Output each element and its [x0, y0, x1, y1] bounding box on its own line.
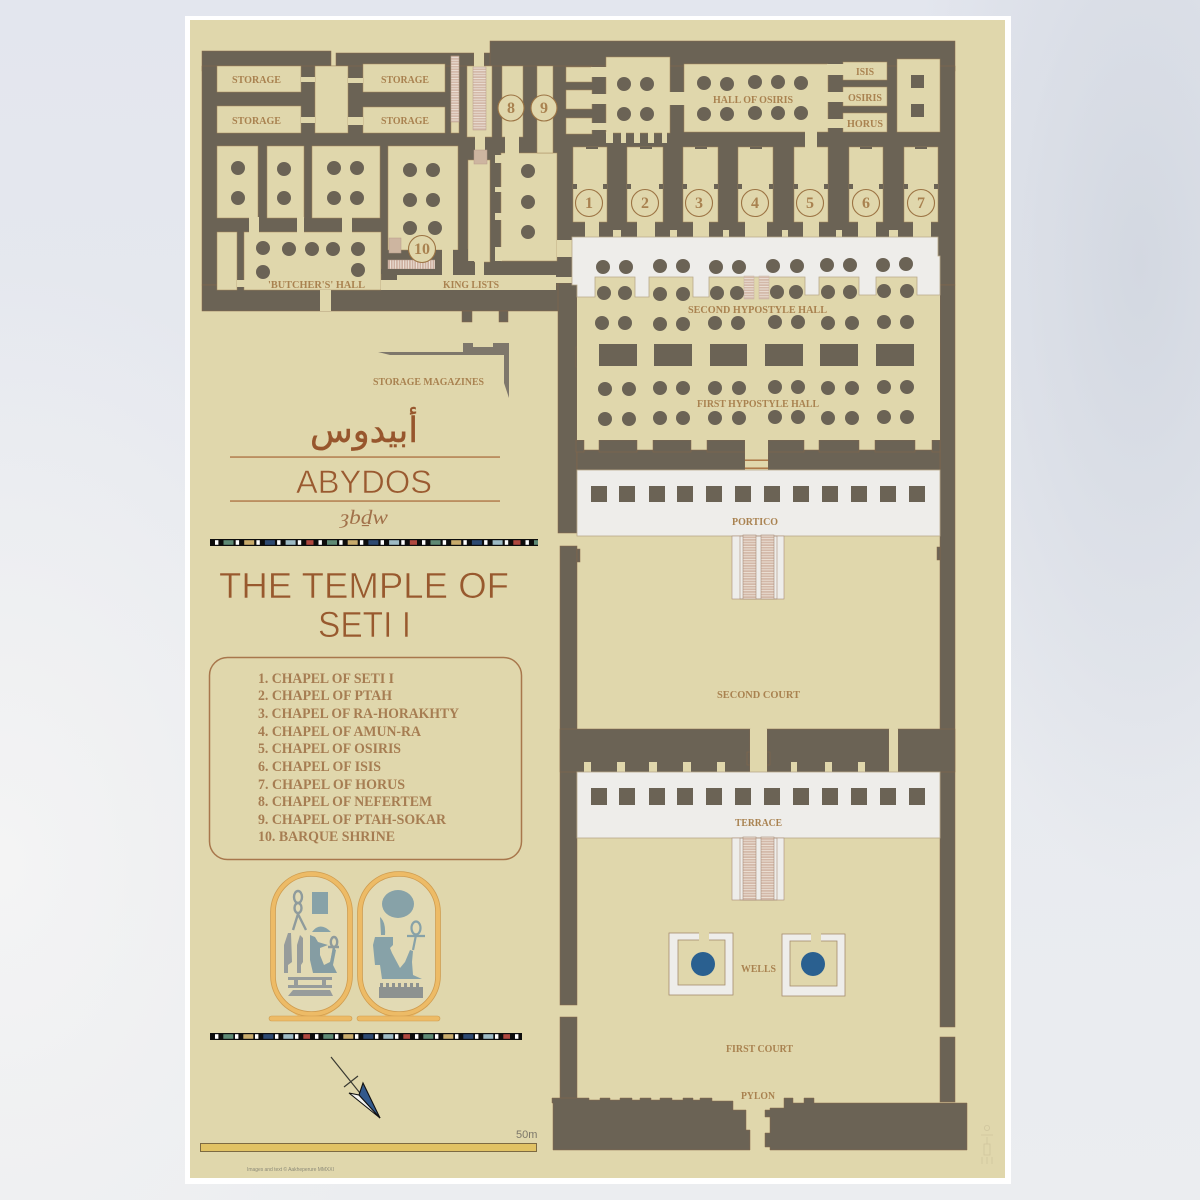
column halls — [217, 146, 458, 290]
room labels: WELLS — [741, 963, 776, 975]
arabic name: أبيدوس — [310, 407, 418, 451]
rule below name — [230, 500, 500, 502]
room labels — [232, 66, 883, 1102]
storage magazines plan — [378, 343, 509, 398]
room labels: STORAGE — [381, 74, 429, 86]
doorways and connecting passages — [237, 51, 931, 773]
room labels: STORAGE — [381, 115, 429, 127]
scale label: 50m — [516, 1129, 537, 1141]
left cartouche — [269, 874, 352, 1021]
barque shrine walls — [381, 249, 474, 280]
legend box: 7. CHAPEL OF HORUS — [258, 777, 405, 793]
legend box: 8. CHAPEL OF NEFERTEM — [258, 794, 432, 810]
temple walls — [202, 41, 967, 1150]
portico stairs — [732, 535, 784, 599]
chapel numbers: 10 — [414, 241, 430, 258]
chapel numbers: 7 — [917, 195, 925, 212]
portico — [577, 470, 940, 536]
room labels: HALL OF OSIRIS — [713, 94, 793, 106]
hypostyle hall floor — [577, 277, 940, 440]
doorway to portico — [745, 440, 768, 470]
north arrow — [331, 1057, 380, 1118]
upper white platform — [572, 237, 940, 297]
room labels: PORTICO — [732, 516, 778, 528]
room labels: OSIRIS — [848, 92, 882, 104]
seven chapels — [573, 147, 938, 222]
room labels: ISIS — [856, 66, 874, 78]
terrace stairs — [732, 837, 784, 900]
right cartouche — [357, 874, 440, 1021]
storage rooms — [217, 64, 445, 133]
chapel numbers: 9 — [540, 100, 548, 117]
storage magazines label: STORAGE MAGAZINES — [373, 376, 484, 388]
well: left — [669, 932, 733, 995]
room labels: STORAGE — [232, 115, 281, 127]
room labels: 'BUTCHER'S' HALL — [268, 279, 365, 291]
central stairs of hypostyle — [744, 276, 769, 299]
chapel numbers: 1 — [585, 195, 593, 212]
credit: Images and text © Aakheperure MMXXI — [247, 1166, 334, 1173]
pattern band bottom — [210, 1033, 522, 1040]
stair corridor rooms — [451, 56, 492, 262]
legend box: 3. CHAPEL OF RA-HORAKHTY — [258, 706, 459, 722]
legend box: 6. CHAPEL OF ISIS — [258, 759, 381, 775]
main title: SETI I — [318, 604, 411, 645]
legend box: 5. CHAPEL OF OSIRIS — [258, 741, 401, 757]
room labels: SECOND COURT — [717, 689, 801, 701]
chapel numbers: 4 — [751, 195, 759, 212]
rear stairs — [388, 56, 487, 269]
hypostyle columns and piers — [595, 257, 914, 426]
chapel numbers: 5 — [806, 195, 814, 212]
columns of the inner rooms — [231, 75, 924, 279]
room labels: TERRACE — [735, 817, 782, 829]
well: right — [782, 933, 845, 996]
legend box: 1. CHAPEL OF SETI I — [258, 671, 394, 687]
poster frame — [185, 16, 1011, 1184]
legend box: 10. BARQUE SHRINE — [258, 829, 395, 845]
legend box — [210, 658, 522, 860]
poster paper — [190, 20, 1005, 1178]
room labels: PYLON — [741, 1090, 775, 1102]
legend box: 2. CHAPEL OF PTAH — [258, 688, 393, 704]
main title — [219, 565, 509, 645]
room labels: SECOND HYPOSTYLE HALL — [688, 304, 827, 316]
rooms: rear storage and halls — [217, 56, 940, 290]
room labels: STORAGE — [232, 74, 281, 86]
main title: THE TEMPLE OF — [219, 565, 509, 606]
legend box: 9. CHAPEL OF PTAH-SOKAR — [258, 812, 446, 828]
site name: ABYDOS — [296, 464, 432, 500]
scale bar — [200, 1144, 536, 1152]
chapel side piers — [573, 147, 938, 189]
room labels: KING LISTS — [443, 279, 499, 291]
pattern band top — [210, 539, 538, 546]
terrace — [577, 772, 940, 838]
rule above name — [230, 456, 500, 458]
chapels eight and nine — [501, 66, 557, 261]
osiris suite — [566, 57, 940, 134]
chapel numbers: 8 — [507, 100, 515, 117]
legend box: 4. CHAPEL OF AMUN-RA — [258, 724, 421, 740]
chapel numbers — [414, 100, 925, 258]
maker logo — [981, 1125, 993, 1164]
room labels: HORUS — [847, 118, 883, 130]
chapel numbers: 3 — [695, 195, 703, 212]
chapel numbers: 2 — [641, 195, 649, 212]
chapel numbers: 6 — [862, 195, 870, 212]
numbered chapel markers — [408, 95, 934, 262]
room labels: FIRST HYPOSTYLE HALL — [697, 398, 819, 410]
transliteration: ȝbḏw — [339, 507, 389, 529]
room labels: FIRST COURT — [726, 1043, 794, 1055]
